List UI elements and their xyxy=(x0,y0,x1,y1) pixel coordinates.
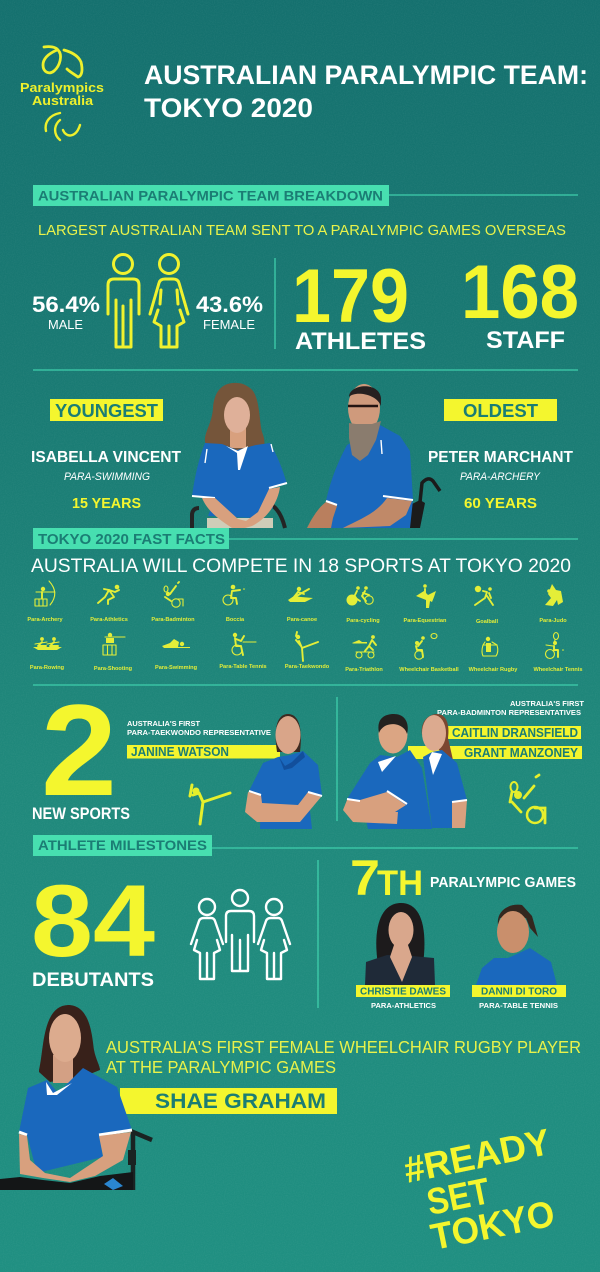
stat: 84 debutants: DEBUTANTS xyxy=(32,969,154,991)
label: para-cycling: Para-cycling xyxy=(346,618,380,624)
stat: female percentage xyxy=(196,292,263,332)
icon: para-canoe xyxy=(288,587,313,602)
callout: Janine Watson: PARA-TAEKWONDO REPRESENTATIVE xyxy=(127,728,271,737)
stat: 179 athletes: 179 xyxy=(292,254,409,339)
stat: 84 debutants: 84 xyxy=(31,864,155,978)
callout: Caitlin Dransfield and Grant Manzoney: PARA-BADMINTON REPRESENTATIVES xyxy=(437,708,581,717)
callout: Shae Graham: AUSTRALIA'S FIRST FEMALE WHEELCHAIR RUGBY PLAYER xyxy=(106,1037,581,1057)
logo: Paralympics Australia: Paralympics xyxy=(20,81,104,95)
hashtag: Ready Set Tokyo xyxy=(400,1121,568,1260)
hashtag: Ready Set Tokyo: #READY xyxy=(400,1121,554,1191)
callout: oldest athlete: PARA-ARCHERY xyxy=(460,471,541,483)
icon: wheelchair basketball xyxy=(415,634,437,659)
stat: 2 new sports: NEW SPORTS xyxy=(32,805,130,823)
icon: para-table tennis xyxy=(232,633,256,655)
icon: para-equestrian xyxy=(416,584,436,608)
title: AUSTRALIAN PARALYMPIC TEAM: xyxy=(144,60,588,90)
icon: para-rowing xyxy=(33,637,62,650)
stat: female percentage: FEMALE xyxy=(203,318,255,332)
logo: Paralympics Australia: Australia xyxy=(32,94,94,108)
icon: three athletes group xyxy=(191,890,290,979)
photo: Isabella Vincent xyxy=(192,383,287,528)
stat: 7th Paralympic Games xyxy=(350,850,576,906)
icon: para-archery xyxy=(35,581,55,606)
label: para-equestrian: Para-Equestrian xyxy=(404,618,447,624)
callout: oldest athlete xyxy=(428,399,574,512)
icon: wheelchair rugby xyxy=(482,637,498,656)
label: wheelchair rugby: Wheelchair Rugby xyxy=(469,667,518,673)
stat: 7th Paralympic Games: PARALYMPIC GAMES xyxy=(430,875,576,891)
label: Christie Dawes xyxy=(356,985,450,1010)
stat: 179 athletes: ATHLETES xyxy=(295,328,426,355)
callout: Shae Graham: SHAE GRAHAM xyxy=(155,1089,326,1113)
stat: male percentage: 56.4% xyxy=(32,292,100,317)
callout: youngest athlete xyxy=(31,399,182,512)
label: para-badminton: Para-Badminton xyxy=(151,617,195,623)
logo: Paralympics Australia xyxy=(20,47,104,140)
label: para-athletics: Para-Athletics xyxy=(90,617,128,623)
callout: Janine Watson: AUSTRALIA'S FIRST xyxy=(127,719,200,728)
icon: para-athletics xyxy=(98,585,119,604)
label: wheelchair tennis: Wheelchair Tennis xyxy=(533,667,583,673)
label: para-triathlon: Para-Triathlon xyxy=(345,667,383,673)
heading: fast facts: TOKYO 2020 FAST FACTS xyxy=(38,532,225,548)
photo: Danni Di Toro xyxy=(476,905,557,985)
photo: Peter Marchant xyxy=(307,384,440,528)
callout: youngest athlete: PARA-SWIMMING xyxy=(64,471,150,483)
label: para-judo: Para-Judo xyxy=(539,618,567,624)
callout: youngest athlete: ISABELLA VINCENT xyxy=(31,449,182,466)
photo: Christie Dawes xyxy=(365,903,435,985)
stat: female percentage: 43.6% xyxy=(196,292,263,317)
photo: Grant Manzoney xyxy=(343,714,432,829)
photo: Janine Watson xyxy=(245,714,322,829)
callout: Caitlin Dransfield and Grant Manzoney: GRANT MANZONEY xyxy=(464,745,578,760)
icon: goalball xyxy=(475,586,493,605)
label: para-canoe: Para-canoe xyxy=(287,617,317,623)
label: para-swimming: Para-Swimming xyxy=(155,665,198,671)
stat: male percentage: MALE xyxy=(48,318,83,332)
heading: team breakdown: AUSTRALIAN PARALYMPIC TEAM BREAKDOWN xyxy=(38,188,383,204)
stat: 2 new sports: 2 xyxy=(41,677,117,823)
callout: oldest athlete: 60 YEARS xyxy=(464,495,537,512)
callout: Shae Graham xyxy=(106,1037,581,1114)
icon: boccia xyxy=(223,585,245,605)
icon: para-taekwondo xyxy=(296,632,318,661)
stat: male percentage xyxy=(32,292,100,332)
label: para-archery: Para-Archery xyxy=(27,617,63,623)
callout: Janine Watson: JANINE WATSON xyxy=(131,744,229,759)
stat: 168 staff: 168 xyxy=(461,250,579,335)
subheading: largest team: LARGEST AUSTRALIAN TEAM SENT TO A PARALYMPIC GAMES OVERSEAS xyxy=(38,222,566,239)
callout: Caitlin Dransfield and Grant Manzoney xyxy=(408,699,584,760)
icon: para-cycling xyxy=(346,586,373,606)
stat: 168 staff: STAFF xyxy=(486,327,565,354)
callout: Caitlin Dransfield and Grant Manzoney: CAITLIN DRANSFIELD xyxy=(452,725,578,740)
heading: athlete milestones: ATHLETE MILESTONES xyxy=(38,837,207,853)
icon: male figure xyxy=(108,254,139,347)
label: Danni Di Toro: DANNI DI TORO xyxy=(481,986,557,998)
icon: wheelchair tennis xyxy=(546,632,564,658)
hashtag: Ready Set Tokyo: SET xyxy=(423,1170,494,1223)
label: para-rowing: Para-Rowing xyxy=(30,665,65,671)
heading: athlete milestones xyxy=(33,835,578,856)
callout: youngest athlete: YOUNGEST xyxy=(55,400,159,421)
heading: team breakdown xyxy=(33,185,578,206)
label: Christie Dawes: PARA-ATHLETICS xyxy=(371,1001,436,1010)
callout: oldest athlete: OLDEST xyxy=(463,400,539,421)
stat: 7th Paralympic Games: 7 xyxy=(350,850,380,906)
label: wheelchair basketball: Wheelchair Basketball xyxy=(399,667,459,673)
label: Christie Dawes: CHRISTIE DAWES xyxy=(360,986,446,998)
icon: para-shooting xyxy=(103,633,125,655)
callout: oldest athlete: PETER MARCHANT xyxy=(428,449,574,466)
icon: taekwondo kick xyxy=(190,785,230,824)
subheading: 18 sports: AUSTRALIA WILL COMPETE IN 18 SPORTS AT TOKYO 2020 xyxy=(31,556,571,577)
title: TOKYO 2020 xyxy=(144,93,313,123)
hashtag: Ready Set Tokyo: TOKYO xyxy=(427,1193,558,1258)
label: para-table tennis: Para-Table Tennis xyxy=(219,664,267,670)
label: goalball: Goalball xyxy=(476,619,498,625)
photo: Caitlin Dransfield xyxy=(422,714,467,828)
callout: Shae Graham: AT THE PARALYMPIC GAMES xyxy=(106,1057,336,1077)
label: Danni Di Toro: PARA-TABLE TENNIS xyxy=(479,1001,558,1010)
photo: Shae Graham xyxy=(0,1005,152,1190)
icon: female figure xyxy=(150,254,188,347)
icon: para-badminton xyxy=(164,582,183,607)
label: para-taekwondo: Para-Taekwondo xyxy=(285,664,330,670)
icon: badminton wheelchair xyxy=(510,775,545,823)
heading: fast facts xyxy=(33,528,578,549)
icon: para-swimming xyxy=(162,639,190,648)
label: para-shooting: Para-Shooting xyxy=(94,666,133,672)
callout: youngest athlete: 15 YEARS xyxy=(72,495,141,512)
icon: para-triathlon xyxy=(352,635,376,658)
icon: para-judo xyxy=(545,584,563,606)
callout: Janine Watson xyxy=(127,719,280,759)
stat: 7th Paralympic Games: TH xyxy=(377,864,423,903)
title xyxy=(144,60,588,123)
callout: Caitlin Dransfield and Grant Manzoney: AUSTRALIA'S FIRST xyxy=(510,699,584,708)
label: Danni Di Toro xyxy=(472,985,566,1010)
label: boccia: Boccia xyxy=(226,617,245,623)
